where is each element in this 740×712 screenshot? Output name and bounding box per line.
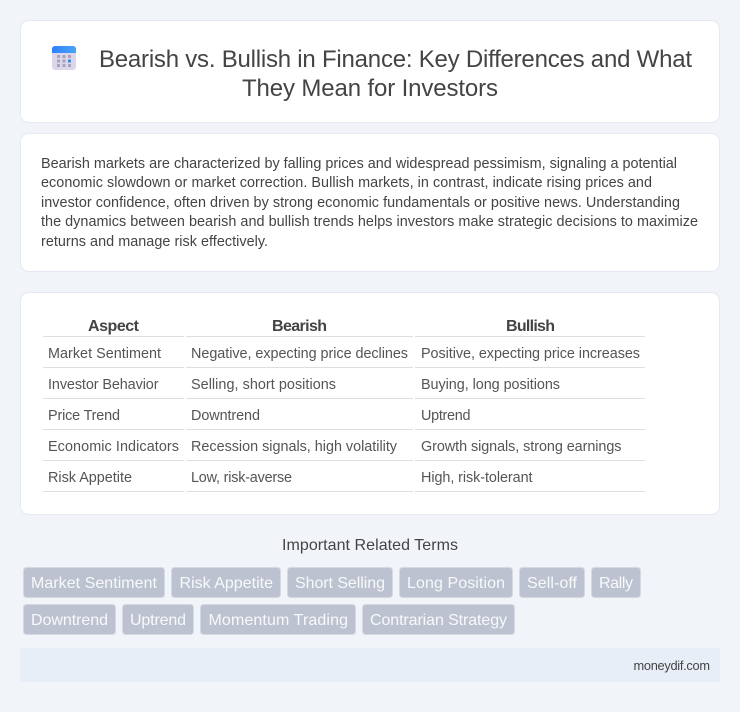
table header — [88, 318, 555, 335]
table header: Bearish — [272, 318, 327, 335]
table header: Aspect — [88, 318, 140, 335]
tag: Downtrend — [24, 604, 116, 634]
table row: investor behavior: Investor Behavior — [48, 377, 159, 393]
tag: Sell-off — [520, 568, 584, 598]
tag: Contrarian Strategy: Contrarian Strategy — [370, 612, 507, 629]
text block: intro: returns and manage risk effectively. — [41, 234, 268, 250]
tag: Rally: Rally — [599, 575, 633, 592]
panel: title header — [20, 20, 720, 122]
tag: Long Position — [400, 568, 512, 598]
text block: intro: investor confidence, often driven by strong economic fundamentals or positive news. Understanding — [41, 195, 680, 211]
tag: Short Selling: Short Selling — [295, 575, 385, 592]
tag: Risk Appetite — [172, 568, 280, 598]
table row: risk appetite: Risk Appetite — [48, 470, 132, 486]
table header: Bullish — [506, 318, 555, 335]
table row: market sentiment: Negative, expecting price declines — [191, 346, 408, 362]
heading: related terms: Important Related Terms — [282, 537, 458, 554]
table row: price trend: Uptrend — [421, 408, 470, 424]
tag: Uptrend — [122, 604, 194, 634]
tag: Short Selling — [288, 568, 392, 598]
tag: Rally — [592, 568, 640, 598]
tag: Market Sentiment — [24, 568, 164, 598]
table row: investor behavior: Selling, short positions — [191, 377, 336, 393]
panel: comparison table — [20, 292, 720, 514]
table row: price trend — [48, 408, 470, 424]
table row: investor behavior: Buying, long positions — [421, 377, 560, 393]
tag list: related terms — [24, 568, 640, 634]
table row: risk appetite: High, risk-tolerant — [421, 470, 532, 486]
title: They Mean for Investors — [242, 75, 498, 102]
table row: market sentiment: Market Sentiment — [48, 346, 161, 362]
text block: intro: economic slowdown or market correction. Bullish markets, in contrast, indicate rising prices and — [41, 175, 652, 191]
table row: economic indicators: Economic Indicators — [48, 439, 179, 455]
text block: intro — [41, 156, 698, 250]
tag: Contrarian Strategy — [362, 604, 514, 634]
table row: economic indicators: Growth signals, strong earnings — [421, 439, 622, 455]
tag: Downtrend: Downtrend — [31, 612, 108, 629]
tag: Risk Appetite: Risk Appetite — [180, 575, 273, 592]
table row: risk appetite — [48, 470, 532, 486]
text block: intro: the dynamics between bearish and bullish trends helps investors make strategic decisions to maximize — [41, 214, 698, 230]
tag: Sell-off: Sell-off — [527, 575, 578, 592]
tag: Uptrend: Uptrend — [130, 612, 186, 629]
table row: investor behavior — [48, 377, 560, 393]
table row: risk appetite: Low, risk-averse — [191, 470, 292, 486]
footer — [20, 648, 720, 682]
title: Bearish vs. Bullish in Finance: Key Differences and What — [99, 46, 692, 73]
table row: market sentiment — [48, 346, 640, 362]
table row: economic indicators — [48, 439, 622, 455]
panel: intro paragraph — [20, 134, 720, 272]
tag: Momentum Trading: Momentum Trading — [208, 612, 348, 629]
icon: calendar — [52, 46, 76, 70]
table row: price trend: Price Trend — [48, 408, 120, 424]
table row: economic indicators: Recession signals, high volatility — [191, 439, 398, 455]
text block: intro: Bearish markets are characterized by falling prices and widespread pessimism, signaling a potential — [41, 156, 677, 172]
footer: moneydif.com — [634, 658, 710, 673]
table row: market sentiment: Positive, expecting price increases — [421, 346, 640, 362]
table row: price trend: Downtrend — [191, 408, 260, 424]
tag: Market Sentiment: Market Sentiment — [31, 575, 158, 592]
tag: Long Position: Long Position — [407, 575, 505, 592]
tag: Momentum Trading — [200, 604, 356, 634]
title — [99, 46, 692, 102]
